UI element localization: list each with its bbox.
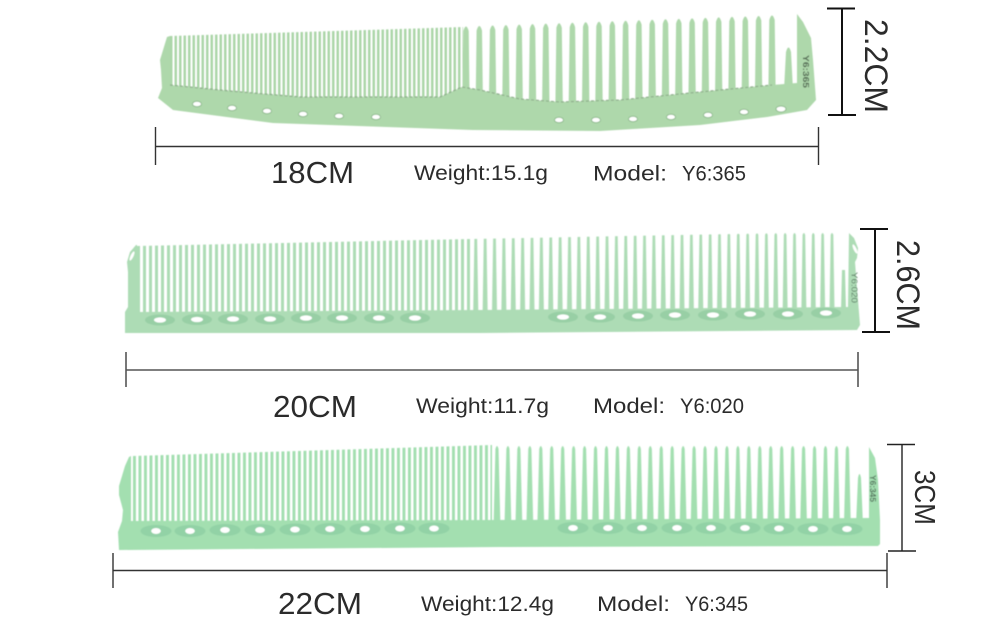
- comb 2: Y6:020: [125, 232, 860, 333]
- label: model Y6:020: Model:: [593, 395, 665, 418]
- comb 3 body: [118, 447, 880, 550]
- comb 3 hole recesses: [140, 522, 862, 537]
- label: 18CM: 18CM: [271, 155, 354, 190]
- comb 3 short tooth: [856, 474, 863, 525]
- label: model Y6:365: [593, 162, 746, 186]
- label: model Y6:345: Model:: [597, 593, 670, 616]
- label: model Y6:020: Y6:020: [680, 395, 744, 418]
- label: model Y6:020: [593, 395, 744, 418]
- comb 2 body: [125, 233, 860, 333]
- comb 1 holes: [192, 101, 786, 123]
- label: 20CM: 20CM: [273, 389, 357, 424]
- comb 1 valley shading: [170, 85, 772, 102]
- comb 1: Y6:365: [158, 14, 816, 131]
- comb 1 fine teeth: [170, 26, 464, 98]
- label: model Y6:345: Y6:345: [685, 593, 748, 616]
- comb 2 tip holes: [129, 244, 858, 261]
- comb 1 width dimension: [156, 127, 818, 165]
- label: 2.6CM: 2.6CM: [890, 240, 926, 330]
- label: 2.2CM: 2.2CM: [858, 19, 894, 113]
- comb 3 width dimension: [113, 553, 887, 588]
- comb 3 coarse teeth: [492, 445, 854, 525]
- comb 3 engraved model: Y6:345: [868, 475, 877, 503]
- label: 3CM: 3CM: [908, 470, 940, 525]
- label: 22CM: 22CM: [278, 586, 362, 621]
- comb 1 engraved model: Y6:365: [801, 55, 810, 89]
- label: model Y6:365: Model:: [593, 162, 667, 186]
- label: model Y6:345: [597, 593, 748, 616]
- label: model Y6:365: Y6:365: [682, 162, 746, 186]
- comb 1 body: [158, 14, 816, 131]
- label: weight 12.4g: Weight:12.4g: [421, 593, 554, 616]
- comb 2 coarse teeth: [471, 232, 836, 317]
- comb 1 coarse teeth: [462, 16, 776, 107]
- comb 3 fine teeth: [132, 444, 493, 522]
- comb 3 holes: [151, 525, 852, 534]
- label: weight 11.7g: Weight:11.7g: [416, 395, 549, 418]
- comb 2 fine teeth: [136, 238, 470, 312]
- comb 2 height dimension: [860, 229, 890, 332]
- comb 2 width dimension: [126, 352, 858, 387]
- comb 3: Y6:345: [118, 445, 880, 550]
- label: weight 15.1g: Weight:15.1g: [414, 162, 548, 185]
- comb 2 engraved model: Y6:020: [850, 272, 858, 304]
- comb 2 holes: [154, 310, 832, 323]
- comb 3 height dimension: [887, 444, 916, 551]
- comb 1 short tooth: [784, 48, 793, 90]
- comb 2 short tooth: [841, 270, 846, 310]
- comb 2 hole recesses: [145, 308, 841, 326]
- comb 1 height dimension: [827, 8, 856, 115]
